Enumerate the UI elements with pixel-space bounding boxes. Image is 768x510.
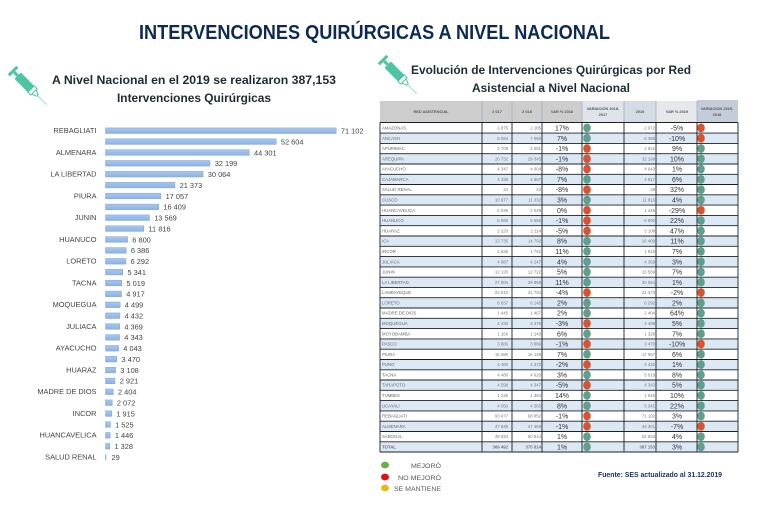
table rows: 1%	[557, 434, 567, 441]
table rows: -2%	[671, 290, 683, 297]
table rows: 3 886	[497, 342, 509, 347]
table rows: 4%	[557, 259, 567, 266]
table rows: 14 792	[528, 239, 542, 244]
table rows: 2 114	[531, 228, 542, 233]
bar chart: JULIACA	[66, 322, 97, 331]
table rows: INCOR	[382, 249, 396, 254]
bar chart: 71 102	[341, 126, 364, 136]
table rows: HUARAZ	[382, 228, 400, 233]
table rows: 4 050	[497, 403, 509, 408]
table rows: 7%	[672, 249, 682, 256]
table rows: 6 037	[497, 300, 509, 305]
bar chart: LA LIBERTAD	[50, 170, 96, 178]
table rows: 2 681	[530, 146, 542, 151]
icon: left syringe	[8, 66, 51, 109]
table rows: 49 934	[495, 434, 509, 439]
table rows: JUNIN	[382, 270, 395, 275]
table rows: ANCASH	[382, 136, 400, 141]
table rows: 1 445	[497, 311, 509, 316]
table rows: 2 028	[530, 208, 542, 213]
table rows: SABOGAL	[382, 434, 403, 439]
table rows: 4 433	[497, 321, 509, 326]
table rows: 2 220	[497, 228, 509, 233]
table rows: -5%	[556, 383, 568, 390]
bar chart: 1 446	[115, 431, 133, 440]
table rows: 24	[503, 187, 509, 192]
bar chart: 4 499	[125, 301, 143, 310]
table rows: 6 386	[644, 136, 656, 141]
bar chart: TACNA	[72, 278, 97, 287]
table rows: 17 057	[642, 352, 656, 357]
table rows: 4%	[672, 434, 682, 441]
bar chart: 1 915	[116, 409, 135, 418]
table rows: 6 594	[497, 136, 509, 141]
table rows: 3 470	[644, 342, 656, 347]
table rows: 4 347	[497, 167, 509, 172]
table rows: 6 292	[644, 300, 656, 305]
table rows: TACNA	[382, 372, 396, 377]
table rows: 4 087	[497, 259, 509, 264]
bar chart: MOQUEGUA	[53, 300, 97, 309]
bar chart: 21 373	[180, 181, 202, 190]
table rows: 3%	[672, 444, 682, 451]
table rows: 1 635	[497, 249, 509, 254]
bar chart: REBAGLIATI	[54, 126, 96, 135]
bar chart: 13 569	[154, 214, 177, 222]
table header: VAR % 2018	[551, 109, 574, 114]
table header: 2 018	[522, 109, 533, 114]
panel heading: bar chart	[52, 73, 336, 105]
table rows: 6%	[557, 331, 567, 338]
table rows: 4%	[672, 198, 682, 205]
table header: 2 017	[492, 109, 502, 114]
table rows: 27 004	[495, 280, 509, 285]
table rows: 4 620	[530, 372, 542, 377]
legend: SE MANTIENE	[394, 487, 441, 493]
table header: 2019	[636, 109, 645, 114]
table rows: 68 852	[528, 414, 542, 419]
bar chart: HUANCAVELICA	[40, 431, 97, 440]
table rows: -8%	[556, 167, 568, 174]
bar chart: ALMENARA	[56, 148, 97, 157]
table rows: 11 332	[528, 198, 542, 203]
table rows: 4 369	[644, 259, 656, 264]
bar chart: MADRE DE DIOS	[37, 387, 97, 396]
bar chart: 52 604	[281, 137, 304, 146]
table rows: -10%	[669, 136, 685, 143]
table rows: TOTAL	[382, 444, 396, 449]
table rows: LAMBAYEQUE	[382, 290, 411, 295]
table header: VARIACION 2019-	[701, 106, 734, 111]
table rows: -1%	[556, 218, 568, 225]
table rows: 2 185	[530, 126, 542, 131]
bar chart: 6 800	[132, 235, 151, 244]
source note: Fuente: SES actualizado al 31.12.2019	[598, 470, 722, 479]
table rows: 0%	[557, 208, 567, 215]
table rows: 1 761	[530, 249, 542, 254]
table rows: ALMENARA	[382, 424, 406, 429]
table rows: 4 667	[530, 177, 542, 182]
table rows: 1 875	[497, 126, 509, 131]
table rows: 1%	[557, 444, 567, 451]
bar chart: 17 057	[166, 192, 188, 201]
table rows: 20 732	[495, 156, 509, 161]
table rows: 9%	[672, 146, 682, 153]
table rows: 5 585	[497, 218, 509, 223]
table rows: 3 108	[644, 228, 656, 233]
legend: MEJORÓ	[411, 463, 441, 470]
table rows: UCAYALI	[382, 403, 400, 408]
table rows: 5 556	[530, 218, 542, 223]
table header: 2018	[713, 112, 722, 117]
legend	[381, 462, 441, 493]
table rows: -5%	[556, 228, 568, 235]
table rows: MOQUEGUA	[382, 321, 408, 326]
table rows: 2%	[557, 300, 567, 307]
table rows: APURIMAC	[382, 146, 405, 151]
table header: VAR % 2019	[666, 109, 689, 114]
table rows: 13 735	[495, 239, 509, 244]
table rows: MADRE DE DIOS	[382, 311, 417, 316]
table rows: MOYOBAMBA	[382, 331, 410, 336]
bar chart: 6 386	[131, 246, 149, 255]
panel heading: bar chart: A Nivel Nacional en el 2019 se realizaron 387,153	[52, 73, 336, 87]
table rows: 2 404	[644, 311, 656, 316]
bar chart: 2 404	[118, 388, 136, 397]
table rows: 1%	[672, 362, 682, 369]
table rows: 64%	[670, 311, 684, 318]
table rows: 3%	[672, 414, 682, 421]
table rows: HUANUCO	[382, 218, 404, 223]
table rows: 1 166	[497, 331, 509, 336]
table rows: -3%	[556, 321, 568, 328]
table rows	[380, 123, 738, 452]
table rows: 4 460	[497, 362, 509, 367]
table rows: -1%	[556, 146, 568, 153]
table rows: 4 043	[644, 167, 656, 172]
table rows: 6 145	[530, 300, 542, 305]
table rows: 2 036	[497, 208, 509, 213]
table rows: 2%	[672, 300, 682, 307]
table rows: 7%	[672, 331, 682, 338]
table rows: 3%	[557, 198, 567, 205]
bar chart: 11 816	[148, 224, 171, 233]
table rows: 1%	[672, 167, 682, 174]
table rows: 1 467	[530, 311, 542, 316]
bar chart: 30 064	[208, 170, 230, 179]
bar chart: 4 343	[124, 333, 143, 342]
table rows: 3%	[557, 372, 567, 379]
table rows: 15 080	[495, 352, 509, 357]
table rows: 369 492	[492, 444, 509, 449]
table rows: JULIACA	[382, 259, 400, 264]
table rows: 7%	[557, 352, 567, 359]
table rows: 29 345	[528, 156, 542, 161]
table rows: AREQUIPA	[382, 156, 404, 161]
table rows: 5 019	[644, 372, 656, 377]
table rows: 6%	[672, 177, 682, 184]
table rows: 2%	[557, 311, 567, 318]
table rows: 7 060	[530, 136, 542, 141]
bar chart: 5 019	[126, 279, 145, 288]
bar chart: AYACUCHO	[56, 344, 97, 353]
table rows: -2%	[556, 362, 568, 369]
table rows: 11 816	[642, 198, 656, 203]
table rows: -5%	[671, 126, 683, 133]
bar chart: 3 470	[122, 355, 140, 364]
table rows: 22%	[670, 218, 684, 225]
icon: right syringe	[378, 55, 421, 98]
table rows: 21 754	[528, 290, 542, 295]
bar chart: INCOR	[73, 409, 96, 418]
table rows: 2 072	[644, 126, 656, 131]
table rows: -1%	[556, 424, 568, 431]
table rows: 4 279	[530, 321, 542, 326]
table rows: 2 708	[497, 146, 509, 151]
table header: 2017	[599, 112, 607, 117]
table rows: TUMBES	[382, 393, 400, 398]
table rows: 4 004	[530, 167, 542, 172]
table rows: 375 814	[525, 444, 542, 449]
bar chart: 44 301	[254, 148, 277, 157]
table rows: 29 858	[528, 280, 542, 285]
table rows: CAJAMARCA	[382, 177, 409, 182]
table rows: 7%	[557, 136, 567, 143]
bar chart: LORETO	[66, 257, 97, 266]
panel heading: bar chart: Intervenciones Quirúrgicas	[117, 91, 271, 105]
table rows: ICA	[382, 239, 389, 244]
table rows: 47 468	[528, 424, 542, 429]
table rows: 4 499	[644, 321, 656, 326]
table rows: 2 921	[644, 146, 656, 151]
bar chart: 1 328	[114, 442, 133, 451]
table rows: -7%	[671, 424, 683, 431]
table rows: -1%	[556, 342, 568, 349]
table rows: PUNO	[382, 362, 395, 367]
table rows: 47 849	[495, 424, 509, 429]
table rows: 21 373	[642, 290, 656, 295]
table rows: 22%	[670, 403, 684, 410]
table rows: 4 247	[530, 259, 542, 264]
table rows: 4 480	[497, 372, 509, 377]
table rows: 4 917	[644, 177, 656, 182]
bar chart: 4 917	[126, 290, 145, 299]
table rows: 50 514	[528, 434, 542, 439]
table rows: AMAZONAS	[382, 126, 406, 131]
table rows: 3 866	[530, 342, 542, 347]
table rows: 44 301	[642, 424, 656, 429]
table rows: 4 343	[644, 383, 656, 388]
table rows: 71 102	[642, 414, 656, 419]
table rows: 5 341	[644, 403, 656, 408]
table rows: 17%	[555, 126, 569, 133]
table rows: 32%	[670, 187, 684, 194]
bar chart: 32 199	[215, 159, 237, 168]
table rows: 32 199	[642, 156, 656, 161]
table rows: 1%	[672, 280, 682, 287]
table rows: 52 604	[642, 434, 656, 439]
table rows: 1 525	[644, 393, 656, 398]
table rows: 22 610	[495, 290, 509, 295]
table rows: CUSCO	[382, 198, 398, 203]
bar chart: HUANUCO	[59, 235, 97, 244]
table rows: -1%	[556, 414, 568, 421]
table rows: 7%	[557, 177, 567, 184]
table rows: LA LIBERTAD	[382, 280, 409, 285]
table rows: PIURA	[382, 352, 395, 357]
table rows: 6 800	[644, 218, 656, 223]
table rows: 10 977	[495, 198, 509, 203]
table rows: 10%	[670, 393, 684, 400]
table rows: 14%	[555, 393, 569, 400]
bar chart: 29	[112, 453, 120, 462]
table rows: -1%	[556, 156, 568, 163]
table rows: 22	[536, 187, 542, 192]
table rows: 1 236	[497, 393, 509, 398]
table rows: 1 446	[644, 208, 656, 213]
table rows: 47%	[670, 228, 684, 235]
table header: VARIACION 2018-	[587, 106, 620, 111]
bar chart: 3 108	[120, 366, 139, 375]
table rows: -10%	[669, 342, 685, 349]
bar chart: 4 432	[125, 312, 143, 320]
table rows: 6%	[672, 352, 682, 359]
table rows: 13 569	[642, 270, 656, 275]
table rows: 5%	[672, 383, 682, 390]
table rows: 1 328	[644, 331, 656, 336]
table rows: 4 338	[497, 177, 509, 182]
table rows: TARAPOTO	[382, 383, 406, 388]
legend: NO MEJORÓ	[398, 475, 441, 482]
title: INTERVENCIONES QUIRÚRGICAS A NIVEL NACIONAL	[139, 20, 610, 44]
table rows: 387 153	[639, 444, 656, 449]
bar chart: 16 409	[163, 203, 186, 212]
table rows: 29	[650, 187, 656, 192]
panel heading: table: Asistencial a Nivel Nacional	[472, 81, 630, 95]
bar chart	[37, 126, 364, 462]
table rows: 4 365	[530, 403, 542, 408]
table rows: SALUD RENAL	[382, 187, 412, 192]
table rows: 5%	[557, 270, 567, 277]
table rows: 11%	[555, 249, 569, 256]
table rows: 7%	[672, 270, 682, 277]
bar chart: 4 369	[124, 322, 143, 331]
table rows: 11%	[555, 280, 569, 287]
table rows: LORETO	[382, 300, 400, 305]
bar chart: SALUD RENAL	[45, 452, 96, 461]
table rows: 12 722	[528, 270, 542, 275]
table rows: 4 372	[530, 362, 542, 367]
panel heading: table: Evolución de Intervenciones Quirúrgicas por Red	[411, 63, 691, 77]
bar chart: 6 292	[131, 257, 149, 266]
bar chart: 5 341	[128, 268, 146, 277]
table rows: HUANCAVELICA	[382, 208, 415, 213]
table rows: -4%	[556, 290, 568, 297]
table header: RED ASISTENCIAL	[413, 109, 449, 114]
table rows: 4 598	[497, 383, 509, 388]
table rows: 16 129	[528, 352, 542, 357]
bar chart: 2 921	[120, 377, 138, 386]
table header	[380, 100, 738, 122]
bar chart: 4 043	[123, 344, 142, 353]
bar chart: JUNIN	[75, 213, 96, 222]
table rows: AYACUCHO	[382, 167, 406, 172]
bar chart: HUARAZ	[66, 365, 97, 374]
table rows: -29%	[669, 208, 685, 215]
table rows: 12 120	[495, 270, 509, 275]
table rows: 16 409	[642, 239, 656, 244]
table rows: REBAGLIATI	[382, 414, 407, 419]
table rows: 30 064	[642, 280, 656, 285]
table rows: 11%	[670, 239, 684, 246]
table rows: 1 240	[530, 331, 542, 336]
bar chart: PIURA	[74, 191, 97, 200]
table rows: PASCO	[382, 342, 397, 347]
table rows: 8%	[672, 372, 682, 379]
table rows: 1 384	[530, 393, 542, 398]
table rows: 5%	[672, 321, 682, 328]
data table	[380, 100, 738, 452]
table rows: 1 915	[644, 249, 656, 254]
bar chart: 2 072	[117, 398, 135, 408]
bar chart: 1 525	[115, 420, 134, 429]
table rows: 10%	[670, 156, 684, 163]
table rows: 4 432	[644, 362, 656, 367]
table rows: 8%	[557, 239, 567, 246]
panel heading: table	[411, 63, 691, 95]
table rows: 4 347	[530, 383, 542, 388]
table rows: 60 477	[495, 414, 509, 419]
table rows: -8%	[556, 187, 568, 194]
table rows: 3%	[672, 259, 682, 266]
table rows: 8%	[557, 403, 567, 410]
